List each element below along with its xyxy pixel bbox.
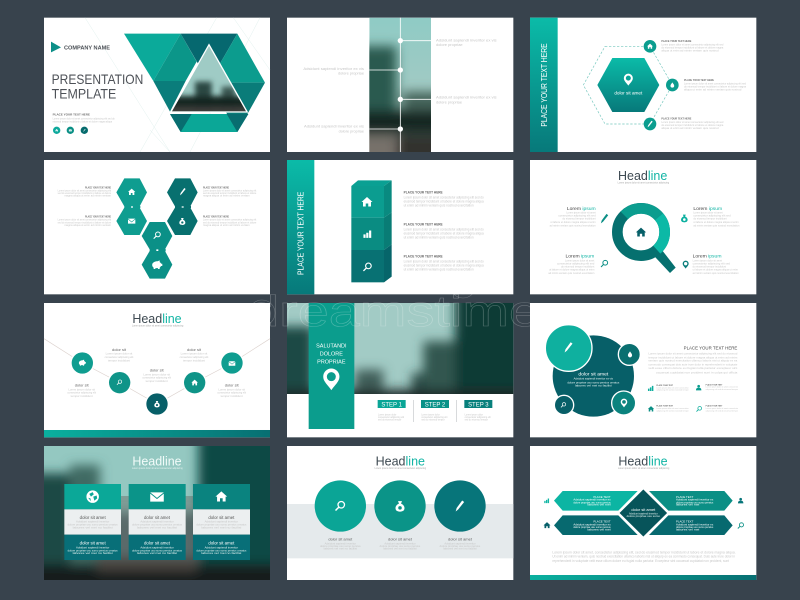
label: lower left: tempor incididunt <box>71 394 93 398</box>
arrow upper right: PLACE TEXT <box>676 495 694 499</box>
item: home: PLACE YOUR TEXT <box>656 405 674 408</box>
panel: V-shaped process <box>44 303 270 437</box>
text: lower right: ut labore et dolore magna aliqua ut enim <box>693 268 739 272</box>
item: bars: Lorem ipsum dolor sit amet consectetur <box>656 386 689 389</box>
arrow lower left: dolore propriae usu sumo persius <box>573 525 611 529</box>
step 1: sed do eiusmod tempor <box>378 418 401 422</box>
text block: eiusmod tempor incididunt ut labore et dolore magna aliqua <box>53 120 112 124</box>
card 1: dolor sit amet <box>80 515 106 520</box>
arrow upper left: labores vel mei <box>587 503 611 507</box>
point: pen <box>644 117 724 130</box>
arrow upper left <box>554 491 638 511</box>
watermark: dreamstime <box>248 287 540 336</box>
circle column 2: dolor sit amet <box>388 536 413 541</box>
text: lower right: Lorem ipsum dolor sit amet consectetur adipiscing elit <box>203 218 257 222</box>
arrow upper right <box>649 491 733 511</box>
text three: eiusmod tempor incididunt ut labore et dolore magna aliqua <box>404 263 484 267</box>
label: top right <box>180 347 209 362</box>
company name: COMPANY NAME <box>64 45 110 51</box>
text block: occaecat cupidatat non proident sunt in culpa qui officia <box>656 371 738 375</box>
circle column 1 <box>315 480 366 551</box>
point: pen: Lorem ipsum dolor sit amet consectetur adipiscing elit sed <box>661 120 724 124</box>
circle column 1: dolor sit amet <box>328 536 353 541</box>
point: home: Lorem ipsum dolor sit amet consectetur adipiscing elit sed <box>661 42 724 46</box>
label: lower right: tempor incididunt <box>221 394 243 398</box>
text one <box>404 191 484 208</box>
text three: ut enim ad minim veniam quis nostrud exercitation <box>404 268 474 272</box>
step 3: consectetur adipiscing elit <box>465 415 491 419</box>
panel: 3D column <box>287 160 513 294</box>
icon: company logo triangle <box>51 42 61 52</box>
text: upper right: Lorem ipsum dolor sit amet consectetur adipiscing elit <box>203 188 257 192</box>
text: upper right <box>693 206 740 227</box>
3D stacked column <box>351 180 392 282</box>
label: centre: tempor incididunt <box>146 379 168 383</box>
item: bars: adipiscing elit sed do eiusmod tempor <box>656 389 689 392</box>
text: upper left: Lorem ipsum dolor sit amet <box>566 211 596 215</box>
card 1: dolore propriae usu sumo persius ornatus <box>68 548 118 552</box>
headline: Headline <box>618 169 667 183</box>
text: lower left <box>58 215 112 227</box>
card 3: dolor sit amet <box>208 541 235 546</box>
circle diagram: dolore propriae usu sumo persius ornatus <box>567 380 620 384</box>
item: home: Lorem ipsum dolor sit amet consectetur <box>656 407 689 410</box>
item: person: PLACE YOUR TEXT <box>706 383 723 386</box>
text block: PLACE YOUR TEXT HERE <box>684 345 737 350</box>
item: search <box>696 405 738 412</box>
teal title card <box>309 303 354 429</box>
text block: tempor incididunt ut labore et dolore magna aliqua ut enim ad minim <box>648 355 738 359</box>
text: upper right: sed do eiusmod tempor incididunt ut labore et dolore <box>203 191 257 195</box>
text: upper left: ut labore et dolore magna aliqua ut enim <box>550 220 596 224</box>
text block: PLACE YOUR TEXT HERE <box>53 113 90 117</box>
label: lower left: consectetur adipiscing elit <box>67 391 96 395</box>
paragraph: Lorem ipsum dolor sit amet, consectetur adipiscing elit, sed do eiusmod tempor incididunt ut labore et dolore magna aliqua. <box>552 551 736 555</box>
label: centre: dolor sit <box>150 368 165 373</box>
circle column 3: dolor sit amet <box>448 536 473 541</box>
label: top left: Lorem ipsum dolor sit <box>106 352 133 356</box>
text: lower left: Lorem ipsum <box>566 254 594 260</box>
point: drop <box>666 78 746 91</box>
central hexagon <box>597 58 659 112</box>
card 3: Adsidunt sapiendi inveritor <box>205 520 238 524</box>
labels: Adsidunt sapiendi inveritor ex vis <box>304 125 364 129</box>
point: home: PLACE YOUR TEXT HERE <box>661 39 692 43</box>
text: lower right: do eiusmod tempor incididunt <box>693 264 726 268</box>
label: lower left: Lorem ipsum dolor sit <box>68 387 95 391</box>
point: drop: do eiusmod tempor incididunt ut labore et dolore magna <box>684 84 746 88</box>
text block <box>648 345 738 375</box>
label: lower left: dolor sit <box>75 383 90 388</box>
panel: photo with steps <box>287 303 514 438</box>
centre diamond: dolore propriae usu sumo <box>627 514 661 518</box>
text: upper right: Lorem ipsum <box>693 206 722 212</box>
side icons <box>544 498 744 529</box>
arrow upper left: dolore propriae usu sumo persius <box>573 500 611 504</box>
arrow lower right: PLACE TEXT <box>676 520 694 524</box>
arrow upper left: Adsidunt sapiendi inveritor ex <box>573 498 611 502</box>
card 1: labores vel mei no facilisi <box>73 551 113 555</box>
text: upper left: consectetur adipiscing elit sed <box>558 214 596 218</box>
label: top left: dolor sit <box>112 347 127 352</box>
text: upper right: magna aliqua ut enim ad minim veniam <box>203 194 250 198</box>
step 3 <box>464 400 492 422</box>
text: upper right: ut labore et dolore magna aliqua ut enim <box>693 220 739 224</box>
city photo <box>44 446 270 580</box>
label: lower right: dolor sit <box>225 383 240 388</box>
text: upper right: PLACE YOUR TEXT HERE <box>203 186 229 190</box>
centre diamond <box>618 488 668 538</box>
headline: Headline <box>132 454 182 468</box>
point: home: do eiusmod tempor incididunt ut labore et dolore magna <box>661 45 724 49</box>
card 1: Adsidunt sapiendi inveritor <box>76 520 109 524</box>
point: drop: Lorem ipsum dolor sit amet consectetur adipiscing elit sed <box>684 81 746 85</box>
label: top right: dolor sit <box>187 347 202 352</box>
timeline line and nodes <box>369 18 431 152</box>
text: lower left: magna aliqua ut enim ad minim veniam <box>64 223 112 227</box>
arrow lower right: Adsidunt sapiendi inveritor ex <box>676 522 714 526</box>
item: person: adipiscing elit sed do eiusmod tempor <box>706 388 738 391</box>
label: centre: consectetur adipiscing elit <box>142 376 171 380</box>
item: person: Lorem ipsum dolor sit amet consectetur <box>706 386 738 389</box>
text block <box>53 113 115 124</box>
text: lower right: magna aliqua ut enim ad minim veniam <box>203 223 250 227</box>
label: top right: Lorem ipsum dolor sit <box>181 352 208 356</box>
circle column 1: labores vel mei no facilisi <box>324 547 357 551</box>
panel: three circles on band <box>287 446 513 580</box>
circle column 3: labores vel mei no facilisi <box>443 547 477 551</box>
arrow lower right: dolore propriae usu sumo persius <box>676 525 714 529</box>
item: search: PLACE YOUR TEXT <box>706 405 723 408</box>
text block: Lorem ipsum dolor sit amet consectetur adipiscing elit sed do eiusmod <box>648 352 738 356</box>
labels: dolore propriae <box>339 129 364 133</box>
step 3: STEP 3 <box>468 402 489 408</box>
arrow lower left: Adsidunt sapiendi inveritor ex <box>573 522 611 526</box>
text: lower left: Lorem ipsum dolor sit amet consectetur adipiscing elit <box>58 218 111 222</box>
point: pen: PLACE YOUR TEXT HERE <box>661 117 692 121</box>
text: upper left: magna aliqua ut enim ad minim veniam <box>64 194 112 198</box>
connecting line <box>44 339 270 404</box>
step 1: Lorem ipsum dolor <box>378 412 396 416</box>
card 2: dolore propriae usu sumo persius ornatus <box>132 548 183 552</box>
text: lower left <box>548 254 595 275</box>
step 3: Lorem ipsum dolor <box>465 412 483 416</box>
side icons <box>601 214 689 269</box>
label: lower right: Lorem ipsum dolor sit <box>218 387 245 391</box>
text two: PLACE YOUR TEXT HERE <box>404 223 443 227</box>
labels: Adsidunt sapiendi inveritor ex vis <box>436 96 497 100</box>
text: upper right: do eiusmod tempor incididunt <box>693 217 727 221</box>
card 2 <box>129 484 186 560</box>
card 3: dolore propriae usu sumo persius ornatus <box>196 548 247 552</box>
arrow upper left: PLACE TEXT <box>593 495 611 499</box>
item: bars <box>648 384 689 392</box>
labels: dolore propriae <box>338 72 364 76</box>
headline caption: Lorem ipsum dolor sit amet consectetur adipiscing <box>132 325 184 328</box>
text two: ut enim ad minim veniam quis nostrud exercitation <box>404 236 474 240</box>
label: lower right: consectetur adipiscing elit <box>217 391 246 395</box>
point: home <box>644 39 724 53</box>
photo strip <box>369 18 431 152</box>
text block: Lorem ipsum dolor sit amet consectetur adipiscing elit sed do <box>53 116 115 120</box>
text: lower right <box>693 254 739 275</box>
headline caption: Lorem ipsum dolor sit amet consectetur adipiscing <box>132 467 183 470</box>
label: lower left <box>67 383 96 398</box>
text: upper left: Lorem ipsum dolor sit amet consectetur adipiscing elit <box>58 188 111 192</box>
text: lower left: ut labore et dolore magna aliqua ut enim <box>549 268 595 272</box>
circle column 2: labores vel mei no facilisi <box>383 547 417 551</box>
text one: ut enim ad minim veniam quis nostrud exercitation <box>404 204 474 208</box>
panel: presentation template cover <box>44 18 270 152</box>
panel: magnifier <box>530 160 756 294</box>
text: lower right: consectetur adipiscing elit sed <box>693 261 731 265</box>
watermark <box>248 272 552 336</box>
card 2: labores vel mei no facilisi <box>137 525 178 529</box>
central hexagon: dolor sit amet <box>614 91 643 96</box>
text three <box>404 255 484 272</box>
label: top right: tempor incididunt <box>183 358 205 362</box>
arrow upper right: Adsidunt sapiendi inveritor ex <box>676 498 714 502</box>
labels: dolore propriae <box>436 100 462 104</box>
circle column 2: dolore propriae usu sumo persius <box>380 544 421 548</box>
text three: Lorem ipsum dolor sit amet consectetur adipiscing elit sed do <box>404 259 484 263</box>
card 2: dolor sit amet <box>144 515 171 520</box>
circle diagram: Adsidunt sapiendi inveritor ex vis <box>574 377 614 381</box>
card 2: Adsidunt sapiendi inveritor <box>140 545 174 549</box>
item: bars: PLACE YOUR TEXT <box>656 384 674 387</box>
text: upper right: Lorem ipsum dolor sit amet <box>693 211 723 215</box>
step circles <box>70 351 244 416</box>
footer bar <box>44 430 270 437</box>
card 1: labores vel mei no facilisi <box>73 525 113 529</box>
panel: circles cluster <box>530 303 756 437</box>
social icons <box>53 127 88 134</box>
point: pen: do eiusmod tempor incididunt ut labore et dolore magna <box>661 123 724 127</box>
step 1: STEP 1 <box>381 402 403 408</box>
text one: Lorem ipsum dolor sit amet consectetur adipiscing elit sed do <box>404 195 484 199</box>
label: lower right <box>217 383 246 398</box>
card 2: dolor sit amet <box>144 541 171 546</box>
teal title card: DOLORE <box>320 352 343 358</box>
arrow lower left: labores vel mei <box>587 527 611 531</box>
text: upper left: sed do eiusmod tempor incididunt ut labore et dolore <box>58 191 111 195</box>
card 3: Adsidunt sapiendi inveritor <box>205 545 238 549</box>
magnifier chart <box>617 208 676 273</box>
label: top left: tempor incididunt <box>108 358 130 362</box>
text: lower left: consectetur adipiscing elit sed <box>557 261 595 265</box>
text: lower right: sed do eiusmod tempor incididunt ut labore et dolore <box>203 220 257 224</box>
city photo <box>287 303 514 394</box>
arrow lower left: PLACE TEXT <box>593 520 611 524</box>
arrow lower right: labores vel mei <box>676 527 700 531</box>
item: search: adipiscing elit sed do eiusmod tempor <box>706 409 738 412</box>
headline caption: Lorem ipsum dolor sit amet consectetur adipiscing <box>618 182 670 185</box>
centre diamond: Adsidunt sapiendi inveritor <box>629 511 658 515</box>
card 1: dolore propriae usu sumo persius ornatus <box>68 523 118 527</box>
headline: Headline <box>376 454 425 468</box>
point: drop: PLACE YOUR TEXT HERE <box>684 78 714 82</box>
labels <box>303 39 497 133</box>
text block: velit esse cillum dolore eu fugiat nulla pariatur excepteur sint <box>648 366 738 370</box>
panel: arrows and diamond <box>530 446 756 580</box>
panel: hexagon with three points <box>530 18 756 152</box>
point: drop: aliqua ut enim ad minim veniam quis nostrud <box>684 87 742 91</box>
hexagon with triangular photo <box>124 34 265 132</box>
text: lower left: PLACE YOUR TEXT HERE <box>85 215 111 219</box>
headline: Headline <box>618 454 668 468</box>
dashed hexagon outline <box>583 46 672 124</box>
text one: PLACE YOUR TEXT HERE <box>404 191 443 195</box>
point: pen: aliqua ut enim ad minim veniam quis nostrud <box>661 126 719 130</box>
text three: PLACE YOUR TEXT HERE <box>404 255 443 259</box>
text: lower left: sed do eiusmod tempor incididunt ut labore et dolore <box>58 220 111 224</box>
circle diagram <box>545 325 640 417</box>
card 3: dolor sit amet <box>208 515 235 520</box>
item: person <box>696 383 738 391</box>
label: top right: consectetur adipiscing elit <box>180 355 209 359</box>
sidebar heading: PLACE YOUR TEXT HERE <box>539 43 549 127</box>
headline caption: Lorem ipsum dolor sit amet consectetur adipiscing <box>618 467 670 470</box>
circle column 3: dolore propriae usu sumo persius <box>440 544 481 548</box>
circle column 1: Adsidunt sapiendi inveritor <box>325 541 356 545</box>
headline caption: Lorem ipsum dolor sit amet consectetur adipiscing <box>375 467 427 470</box>
text: lower right: PLACE YOUR TEXT HERE <box>203 215 229 219</box>
step 3: sed do eiusmod tempor <box>465 418 488 422</box>
circle column 1: dolore propriae usu sumo persius <box>320 544 361 548</box>
text: upper right: consectetur adipiscing elit sed <box>693 214 731 218</box>
card 3: dolore propriae usu sumo persius ornatus <box>196 523 247 527</box>
card 1: dolor sit amet <box>80 541 106 546</box>
step 2: STEP 2 <box>425 402 446 408</box>
step 2: sed do eiusmod tempor <box>421 418 445 422</box>
arrow upper right: dolore propriae usu sumo persius <box>676 500 714 504</box>
labels: dolore propriae <box>436 43 463 47</box>
item: search: Lorem ipsum dolor sit amet consectetur <box>706 407 738 410</box>
headline: Headline <box>132 312 182 326</box>
card 2: labores vel mei no facilisi <box>137 551 178 555</box>
labels: Adsidunt sapiendi inveritor ex vis <box>436 39 497 43</box>
text one: eiusmod tempor incididunt ut labore et dolore magna aliqua <box>404 199 484 203</box>
text: lower left: ad minim veniam quis nostrud exercitation <box>548 271 595 275</box>
paragraph <box>552 551 736 563</box>
step 2: consectetur adipiscing elit <box>421 415 448 419</box>
item: home: adipiscing elit sed do eiusmod tempor <box>656 409 689 412</box>
point: home: aliqua ut enim ad minim veniam quis nostrud <box>661 48 719 52</box>
text: upper right: ad minim veniam quis nostrud exercitation <box>693 223 740 227</box>
card 3: labores vel mei no facilisi <box>201 525 242 529</box>
text: upper left: do eiusmod tempor incididunt <box>562 217 596 221</box>
step 1: consectetur adipiscing elit <box>378 415 404 419</box>
circle column 3: Adsidunt sapiendi inveritor <box>444 541 476 545</box>
text: upper left <box>550 206 596 227</box>
step 2 <box>421 400 449 422</box>
text two: eiusmod tempor incididunt ut labore et dolore magna aliqua <box>404 231 484 235</box>
arrow lower right <box>649 515 733 535</box>
text: lower right: Lorem ipsum dolor sit amet <box>693 258 722 262</box>
teal title card: SALUTANDI <box>316 344 347 350</box>
circle column 2 <box>374 480 426 551</box>
circle diagram: dolor sit amet <box>578 372 609 378</box>
paragraph: Ut enim ad minim veniam, quis nostrud exercitation ullamco laboris nisi ut aliquip ex ea commodo consequat. Duis aute irure dolor in <box>552 555 735 559</box>
label: centre: Lorem ipsum dolor sit <box>143 372 170 376</box>
text: lower left: Lorem ipsum dolor sit amet <box>565 258 595 262</box>
panel: photo with three cards <box>44 446 270 580</box>
title: PRESENTATION <box>52 71 143 87</box>
text: lower right <box>203 215 257 227</box>
card 1: Adsidunt sapiendi inveritor <box>76 545 109 549</box>
card 2: Adsidunt sapiendi inveritor <box>140 520 174 524</box>
text block: commodo consequat duis aute irure dolor in reprehenderit in voluptate <box>648 362 738 366</box>
card 3 <box>193 484 250 560</box>
text: upper right <box>203 186 257 198</box>
card 1 <box>64 484 121 560</box>
label: centre <box>142 368 171 383</box>
text: upper left: ad minim veniam quis nostrud exercitation <box>550 223 596 227</box>
text: lower left: do eiusmod tempor incididunt <box>561 264 595 268</box>
hexagons with icons <box>116 178 198 279</box>
text: lower right: ad minim veniam quis nostrud exercitation <box>693 271 739 275</box>
subtitle: TEMPLATE <box>52 86 116 102</box>
panel: hexagon cluster <box>44 160 270 294</box>
text: lower right: Lorem ipsum <box>693 254 721 260</box>
label: top left: consectetur adipiscing elit <box>105 355 134 359</box>
footer bar <box>530 575 756 580</box>
panel: vertical timeline on photo <box>287 18 513 165</box>
label: top left <box>105 347 134 362</box>
arrow lower left <box>554 515 638 535</box>
text: upper left: PLACE YOUR TEXT HERE <box>85 186 111 190</box>
paragraph: reprehenderit in voluptate velit esse cillum dolore eu fugiat nulla pariatur. Excepteur sint occaecat cupidatat non proident, sunt <box>552 559 729 563</box>
circle diagram: labores vel mei no facilisi <box>575 384 612 388</box>
text: upper left: Lorem ipsum <box>567 206 596 212</box>
text two: Lorem ipsum dolor sit amet consectetur adipiscing elit sed do <box>404 227 484 231</box>
card 3: labores vel mei no facilisi <box>201 551 242 555</box>
sidebar heading: PLACE YOUR TEXT HERE <box>296 192 306 275</box>
card 2: dolore propriae usu sumo persius ornatus <box>132 523 183 527</box>
text: upper left <box>58 186 112 198</box>
text block: veniam quis nostrud exercitation ullamco laboris nisi ut aliquip ex ea <box>648 359 738 363</box>
arrow upper right: labores vel mei <box>676 503 700 507</box>
teal title card: PROPRIAE <box>317 360 346 366</box>
centre diamond: dolor sit amet <box>631 507 656 512</box>
text two <box>404 223 484 240</box>
circle column 3 <box>434 480 486 551</box>
item: home <box>648 405 689 412</box>
step 2: Lorem ipsum dolor <box>421 412 440 416</box>
step 1 <box>378 400 406 422</box>
labels: Adsidunt sapiendi inveritor ex vis <box>303 67 364 71</box>
circle column 2: Adsidunt sapiendi inveritor <box>384 541 416 545</box>
